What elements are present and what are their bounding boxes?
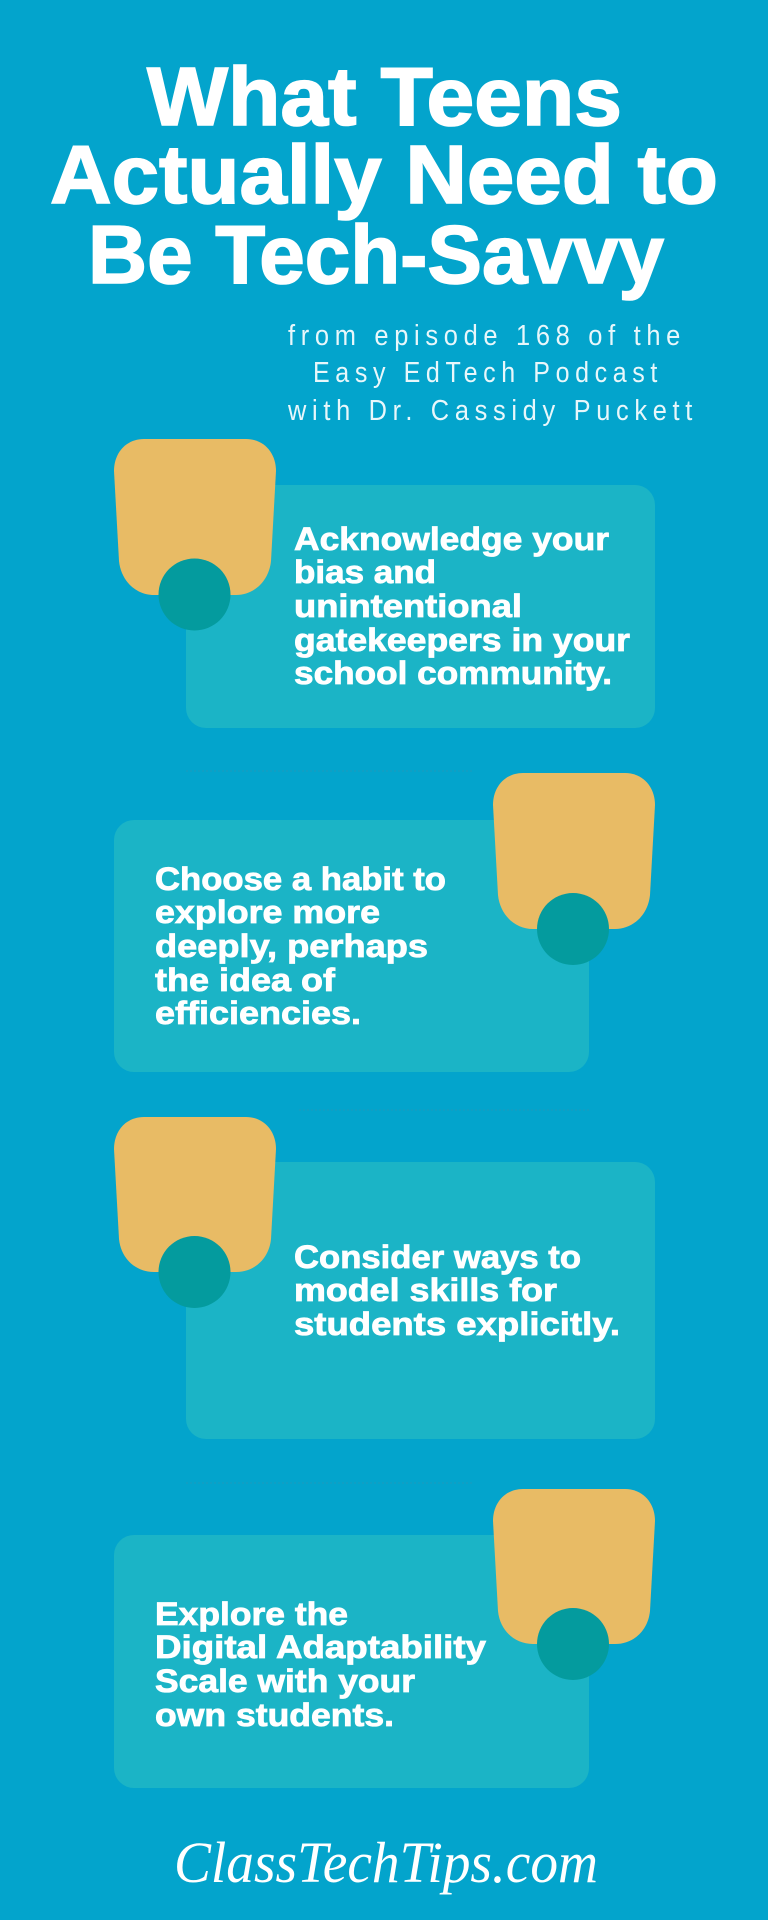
step 3 text: students explicitly.	[294, 1306, 620, 1342]
panel: step 4	[114, 1489, 655, 1788]
subtitle	[287, 320, 698, 427]
subtitle: with Dr. Cassidy Puckett	[287, 395, 698, 427]
step 4 text: Explore the	[155, 1596, 348, 1632]
title	[50, 50, 718, 301]
step 2 text: the idea of	[155, 962, 335, 998]
card background	[114, 820, 589, 1072]
step 2 text: Choose a habit to	[155, 861, 446, 897]
icon: gold tag	[114, 1117, 276, 1272]
step 2 text	[155, 861, 446, 1031]
step 1 text: Acknowledge your	[294, 521, 609, 557]
step 4 text	[155, 1596, 486, 1733]
panel: step 2	[114, 773, 655, 1072]
icon: gold tag	[493, 773, 655, 929]
step 1 text: gatekeepers in your	[294, 622, 630, 658]
step 4 text: own students.	[155, 1697, 394, 1733]
icon: teal circle	[158, 1236, 230, 1308]
panel: step 1	[114, 439, 655, 728]
icon: teal circle	[158, 558, 230, 630]
card background	[186, 485, 655, 728]
step 2 text: explore more	[155, 894, 380, 930]
icon: gold tag	[114, 439, 276, 595]
step 3 text: model skills for	[294, 1272, 557, 1308]
title: Be Tech-Savvy	[88, 208, 664, 301]
subtitle: from episode 168 of the	[288, 320, 686, 352]
step 4 text: Digital Adaptability	[155, 1629, 486, 1665]
icon: teal circle	[537, 893, 609, 965]
title: What Teens	[147, 50, 622, 143]
footer: website: ClassTechTips.com	[174, 1830, 598, 1895]
step 4 text: Scale with your	[155, 1663, 415, 1699]
step 1 text: unintentional	[294, 588, 522, 624]
card background	[114, 1535, 589, 1788]
step 2 text: deeply, perhaps	[155, 928, 428, 964]
step 1 text	[294, 521, 630, 691]
title: Actually Need to	[50, 128, 718, 221]
icon: teal circle	[537, 1608, 609, 1680]
step 1 text: school community.	[294, 655, 612, 691]
card background	[186, 1162, 655, 1439]
step 1 text: bias and	[294, 554, 436, 590]
panel: step 3	[114, 1117, 655, 1439]
subtitle: Easy EdTech Podcast	[313, 357, 663, 389]
step 2 text: efficiencies.	[155, 995, 361, 1031]
step 3 text	[294, 1239, 620, 1342]
icon: gold tag	[493, 1489, 655, 1644]
step 3 text: Consider ways to	[294, 1239, 581, 1275]
